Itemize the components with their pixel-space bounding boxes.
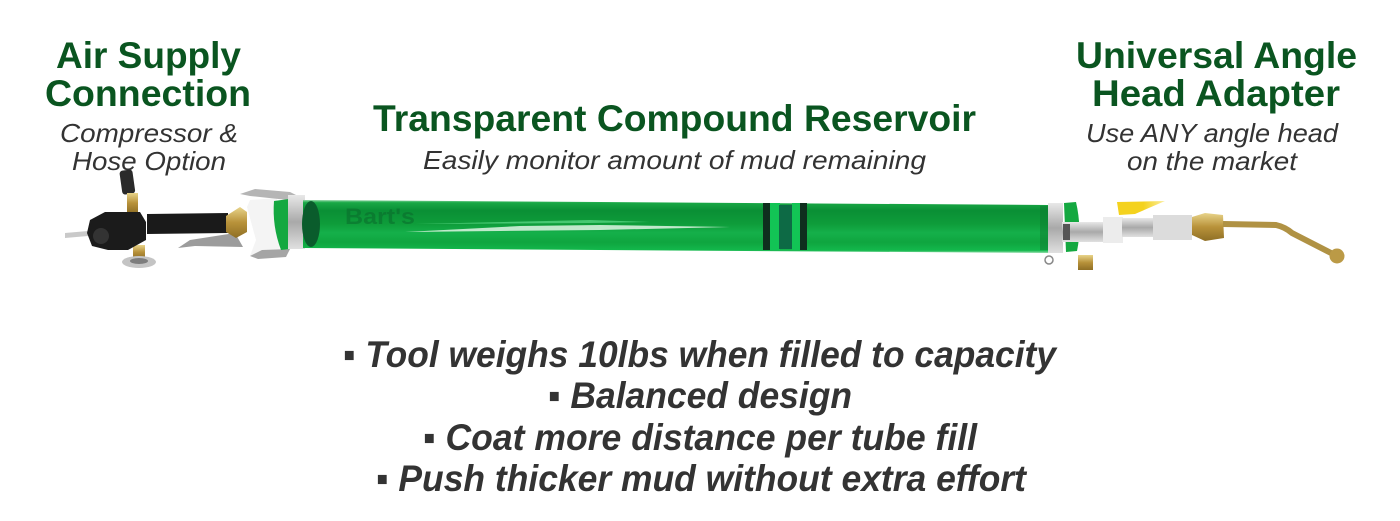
heading: Universal Angle Head Adapter: Universal Angle	[1076, 35, 1357, 76]
tool: mud applicator	[65, 169, 1344, 270]
heading: Air Supply Connection: Air Supply	[56, 35, 241, 76]
bullet list: ▪ Tool weighs 10lbs when filled to capacity	[343, 334, 1058, 375]
heading: Universal Angle Head Adapter	[1076, 35, 1357, 114]
transparent green reservoir tube	[303, 200, 1048, 253]
left collar and clamp	[240, 189, 307, 259]
subtext: monitor mud: Easily monitor amount of mud remaining	[423, 145, 927, 175]
heading: Universal Angle Head Adapter: Head Adapter	[1092, 73, 1340, 114]
bullet list: ▪ Push thicker mud without extra effort	[376, 458, 1028, 499]
heading: Transparent Compound Reservoir: Transparent Compound Reservoir	[373, 98, 976, 139]
bullet list	[343, 334, 1058, 499]
heading: Air Supply Connection	[45, 35, 251, 114]
right clamp and ring	[1045, 202, 1103, 270]
subtext: compressor and hose option	[60, 118, 238, 176]
centre bands	[763, 203, 807, 250]
bullet list: ▪ Coat more distance per tube fill	[423, 417, 978, 458]
heading: Air Supply Connection: Connection	[45, 73, 251, 114]
air supply assembly	[65, 169, 247, 268]
subtext: compressor and hose option: Compressor &	[60, 118, 238, 148]
valve with yellow handle	[1103, 201, 1192, 243]
subtext: use any angle head	[1086, 118, 1340, 176]
tube shading and highlights: Bart's	[345, 204, 415, 229]
subtext: compressor and hose option: Hose Option	[72, 146, 226, 176]
angle head adapter nozzle	[1192, 213, 1344, 264]
tube shading and highlights	[302, 201, 1062, 250]
bullet list: ▪ Balanced design	[548, 375, 852, 416]
subtext: use any angle head: Use ANY angle head	[1086, 118, 1340, 148]
subtext: use any angle head: on the market	[1127, 146, 1299, 176]
